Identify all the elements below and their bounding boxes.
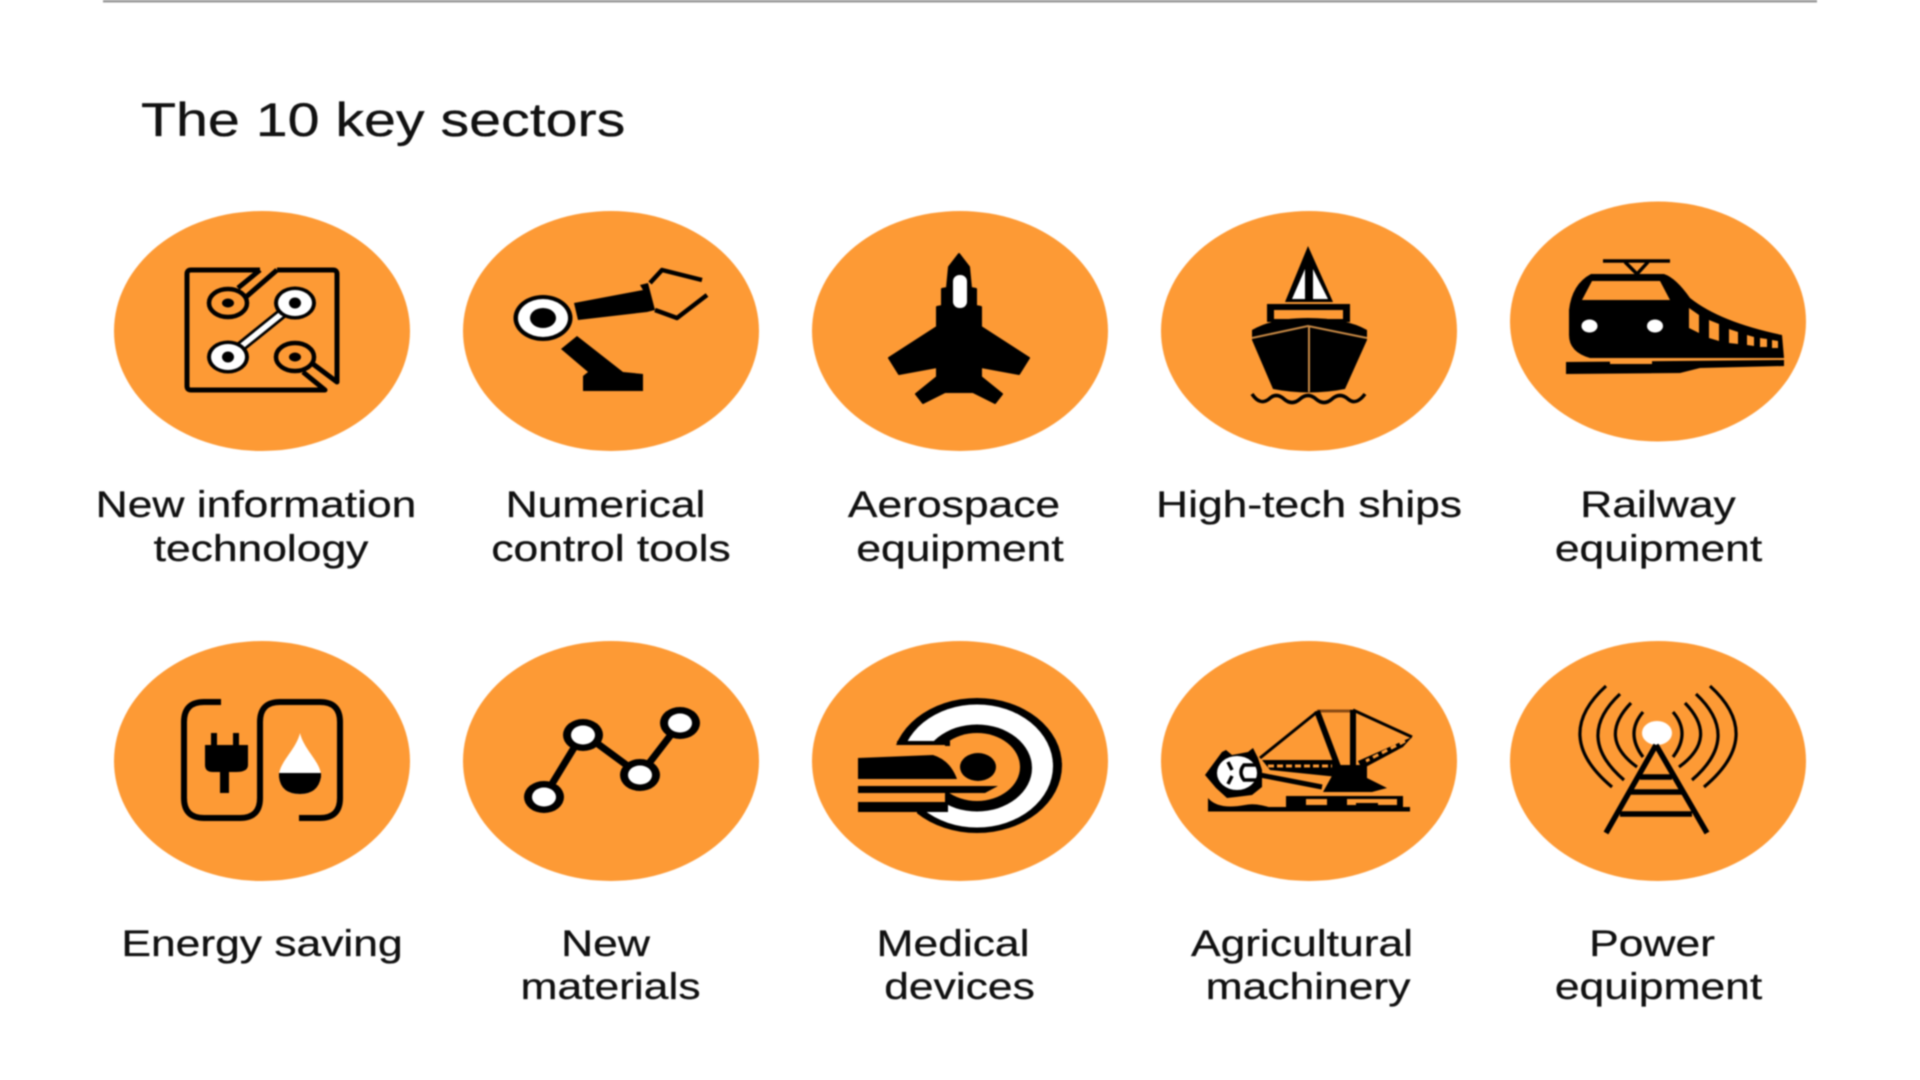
panel: agricultural machinery xyxy=(1161,641,1457,1007)
label: aerospace equipment: Aerospace xyxy=(848,484,1060,525)
label: medical devices xyxy=(877,923,1035,1007)
icon: train xyxy=(1566,261,1784,374)
label: medical devices: devices xyxy=(884,966,1035,1007)
panel: new materials xyxy=(463,641,759,1007)
label: railway equipment xyxy=(1555,484,1763,569)
icon: MRI scanner xyxy=(850,698,1062,835)
label: aerospace equipment: equipment xyxy=(856,528,1064,569)
label: power equipment xyxy=(1555,923,1763,1007)
label: new materials: materials xyxy=(520,966,701,1007)
circle: power equipment xyxy=(1510,641,1806,881)
label: power equipment: Power xyxy=(1589,923,1715,964)
label: power equipment: equipment xyxy=(1555,966,1763,1007)
label: railway equipment: Railway xyxy=(1580,484,1736,525)
icon: robot arm xyxy=(514,270,707,391)
circle: high-tech ships xyxy=(1161,211,1457,451)
label: medical devices: Medical xyxy=(877,923,1029,964)
label: new materials: New xyxy=(561,923,650,964)
label: new materials xyxy=(520,923,701,1007)
title: The 10 key sectors xyxy=(141,95,625,147)
panel: energy saving xyxy=(114,641,410,964)
label: new information technology: technology xyxy=(154,528,369,569)
label: new information technology: New information xyxy=(96,484,416,525)
label: numerical control tools: Numerical xyxy=(506,484,705,525)
icon: connected nodes xyxy=(524,707,700,813)
circle: new materials xyxy=(463,641,759,881)
label: high-tech ships: High-tech ships xyxy=(1156,484,1462,525)
label: agricultural machinery: machinery xyxy=(1206,966,1411,1007)
label: energy saving: Energy saving xyxy=(121,923,403,964)
circle: aerospace equipment xyxy=(812,211,1108,451)
panel: aerospace equipment xyxy=(812,211,1108,569)
icon: transmission tower xyxy=(1580,686,1736,833)
panel: numerical control tools xyxy=(463,211,759,569)
icon: plug and drop xyxy=(184,702,340,818)
circle: agricultural machinery xyxy=(1161,641,1457,881)
panel: high-tech ships xyxy=(1156,211,1462,525)
icon: ship xyxy=(1252,246,1367,402)
label: new information technology xyxy=(96,484,416,569)
panel: power equipment xyxy=(1510,641,1806,1007)
circle: new information technology xyxy=(114,211,410,451)
label: aerospace equipment xyxy=(848,484,1064,569)
panel: new information technology xyxy=(96,211,416,569)
circle: medical devices xyxy=(812,641,1108,881)
circle: energy saving xyxy=(114,641,410,881)
label: numerical control tools xyxy=(491,484,731,569)
circle: railway equipment xyxy=(1510,202,1806,442)
label: numerical control tools: control tools xyxy=(491,528,731,569)
icon: circuit board xyxy=(187,270,337,390)
label: agricultural machinery: Agricultural xyxy=(1191,923,1413,964)
label: railway equipment: equipment xyxy=(1555,528,1763,569)
panel: railway equipment xyxy=(1510,202,1806,569)
icon: fighter jet xyxy=(889,254,1029,403)
icon: bucket wheel excavator xyxy=(1205,710,1412,812)
panel: medical devices xyxy=(812,641,1108,1007)
label: agricultural machinery xyxy=(1191,923,1413,1007)
circle: numerical control tools xyxy=(463,211,759,451)
